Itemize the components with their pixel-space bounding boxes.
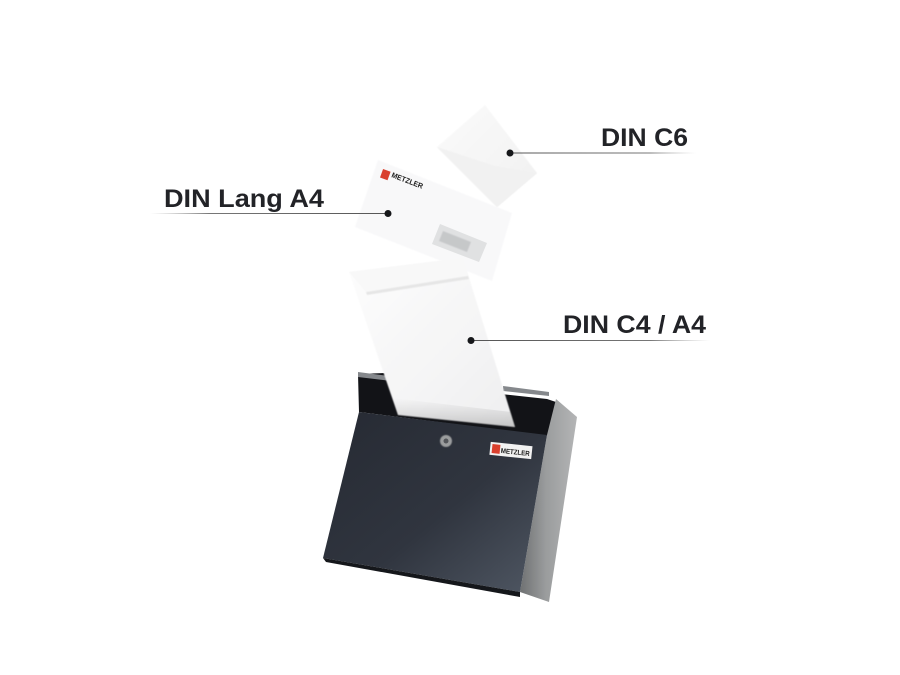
mailbox nameplate: METZLER (500, 448, 530, 458)
mailbox bottom edge (323, 558, 520, 597)
callout: DIN C6: DIN C6 (601, 124, 688, 152)
callout: DIN C4 / A4: DIN C4 / A4 (563, 311, 706, 339)
logo: Metzler on envelope: METZLER (390, 170, 425, 191)
envelope: DIN Lang (355, 160, 512, 281)
callout: DIN Lang A4: DIN Lang A4 (164, 185, 324, 213)
mailbox lock (440, 435, 452, 447)
mailbox side panel (520, 399, 577, 602)
callout: DIN C6 (506, 124, 696, 156)
address window (432, 224, 487, 262)
envelope: DIN C6 (437, 105, 537, 207)
mailbox nameplate (489, 442, 533, 459)
envelope: DIN C4 / A4 (349, 258, 515, 427)
mailbox: back interior and rim (358, 372, 556, 436)
callout: DIN C4 / A4 (468, 311, 710, 344)
mailbox: body (323, 399, 577, 602)
callout: DIN Lang A4 (150, 185, 392, 217)
mailbox front panel (323, 412, 547, 592)
logo: Metzler on envelope (380, 169, 425, 191)
